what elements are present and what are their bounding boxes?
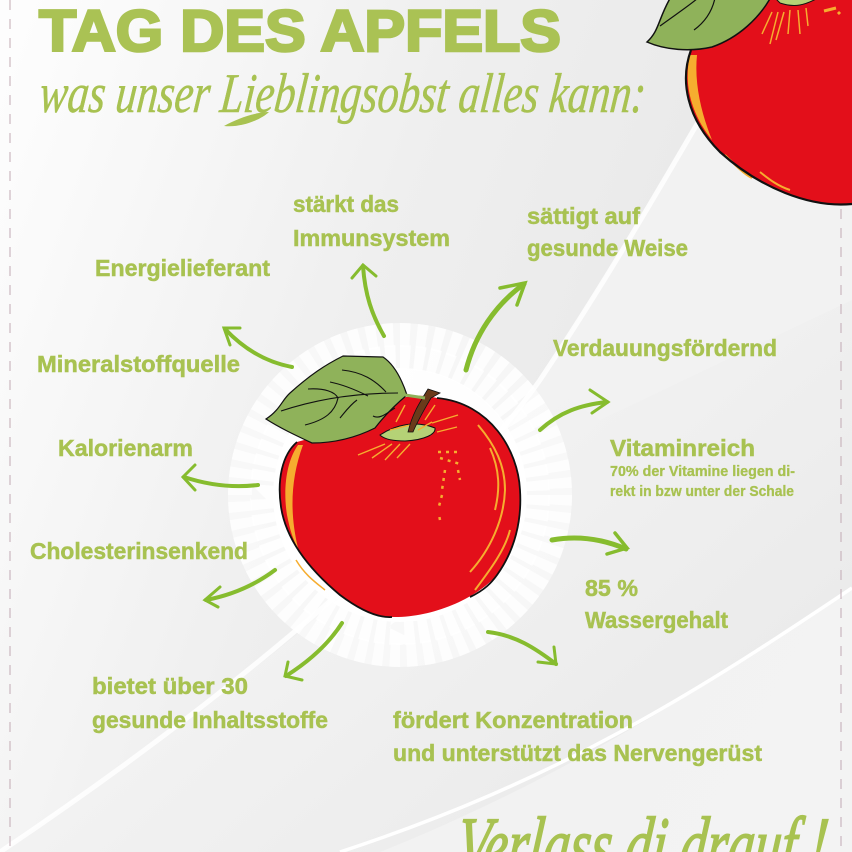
label: Kalorienarm: Kalorienarm — [58, 435, 193, 461]
title: TAG DES APFELS — [39, 0, 561, 64]
leaf — [266, 356, 407, 443]
label: Cholesterinsenkend: Cholesterinsenkend — [30, 538, 248, 564]
label: sättigt auf gesunde Weise: sättigt auf — [527, 203, 640, 229]
cut marks: right dashed line — [840, 0, 842, 852]
arrow: Cholesterinsenkend — [205, 570, 275, 607]
plate: paper doily behind the apple — [228, 323, 572, 667]
arrow: Immunsystem — [352, 265, 384, 336]
label: bietet über 30 gesunde Inhaltsstoffe — [92, 673, 328, 733]
label: 85 % Wassergehalt: 85 % — [585, 575, 638, 601]
label: Vitaminreich: Vitaminreich — [610, 435, 755, 461]
cut marks: left dashed line — [9, 0, 11, 852]
stem — [408, 389, 440, 432]
label: Vitaminreich: rekt in bzw unter der Schale — [610, 484, 794, 500]
label: stärkt das Immunsystem: stärkt das — [293, 191, 399, 217]
arrow: sättigt auf gesunde Weise — [466, 283, 525, 370]
arrow: Verdauungsfördernd — [540, 390, 608, 430]
label: fördert Konzentration und unterstützt das Nervengerüst — [393, 707, 762, 766]
label: stärkt das Immunsystem: Immunsystem — [293, 225, 450, 251]
arrow: Kalorienarm — [183, 465, 258, 490]
arrow: Wassergehalt — [552, 533, 627, 554]
label: Mineralstoffquelle: Mineralstoffquelle — [37, 351, 240, 377]
label: Vitaminreich: 70% der Vitamine liegen di- — [610, 464, 795, 480]
label: fördert Konzentration und unterstützt das Nervengerüst: und unterstützt das Nervengerüst — [393, 740, 762, 766]
stem hollow — [380, 424, 435, 441]
label: stärkt das Immunsystem — [293, 191, 450, 251]
label: sättigt auf gesunde Weise: gesunde Weise — [527, 235, 688, 261]
apple outline — [280, 398, 520, 617]
arrow: Konzentration — [488, 632, 556, 664]
label: fördert Konzentration und unterstützt das Nervengerüst: fördert Konzentration — [393, 707, 633, 733]
icon: central apple — [266, 356, 520, 617]
label: sättigt auf gesunde Weise — [527, 203, 688, 261]
label: Verdauungsfördernd: Verdauungsfördernd — [553, 335, 777, 361]
apple body — [280, 396, 520, 617]
label: 85 % Wassergehalt — [585, 575, 728, 633]
orange highlights — [285, 445, 303, 548]
arrow: Mineralstoffquelle — [224, 328, 292, 367]
icon: large apple cropped top right — [647, 0, 852, 205]
label: bietet über 30 gesunde Inhaltsstoffe: gesunde Inhaltsstoffe — [92, 707, 328, 733]
label: 85 % Wassergehalt: Wassergehalt — [585, 607, 728, 633]
label: bietet über 30 gesunde Inhaltsstoffe: bietet über 30 — [92, 673, 248, 699]
arrow: Inhaltsstoffe — [285, 623, 342, 680]
subtitle: was unser Lieblingsobst alles kann: — [37, 63, 649, 125]
label: Vitaminreich — [610, 435, 795, 500]
label: Energielieferant: Energielieferant — [95, 255, 270, 281]
